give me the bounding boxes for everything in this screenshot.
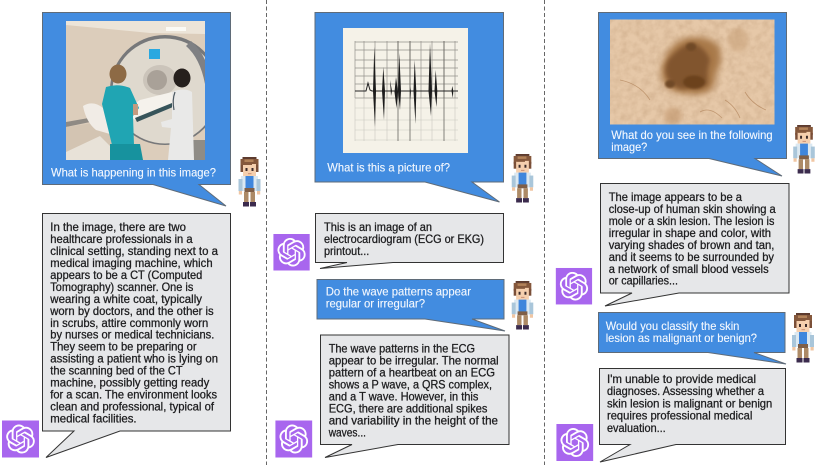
- answer text: and it seems to be surrounded by: [609, 250, 774, 264]
- user avatar: [512, 281, 533, 330]
- user avatar: [792, 313, 814, 362]
- answer text: skin lesion is malignant or benign: [607, 396, 772, 410]
- answer text: evaluation...: [607, 421, 666, 435]
- assistant answer bubble: CT scan: [42, 214, 230, 458]
- answer text: appears to be a CT (Computed: [50, 268, 202, 282]
- follow-up text: lesion as malignant or benign?: [606, 331, 757, 345]
- question text: [611, 128, 773, 154]
- assistant logo: [556, 268, 592, 304]
- answer text: and a T wave. However, in this: [329, 390, 478, 404]
- user follow-up bubble: ECG: [317, 280, 505, 331]
- answer text: [609, 190, 776, 288]
- answer text: ECG, there are additional spikes: [329, 402, 487, 416]
- user avatar: [238, 157, 260, 206]
- follow-up text: Do the wave patterns appear: [326, 285, 471, 299]
- assistant answer bubble: ECG: [316, 214, 504, 268]
- answer text: requires professional medical: [607, 409, 752, 423]
- answer text: medical imaging machine, which: [50, 256, 213, 270]
- question text: image?: [611, 140, 648, 154]
- panel: skin lesion conversation: [556, 12, 815, 462]
- user avatar: [512, 154, 533, 203]
- answer text: varying shades of brown and tan,: [609, 238, 774, 252]
- user question bubble: CT scan: [42, 12, 230, 206]
- image: ECG printout: [343, 28, 468, 153]
- answer text: clean and professional, typical of: [50, 400, 215, 414]
- follow-up text: regular or irregular?: [326, 297, 425, 311]
- answer text: [49, 220, 218, 425]
- answer text: for a scan. The environment looks: [50, 388, 217, 402]
- answer text: electrocardiogram (ECG or EKG): [324, 232, 484, 246]
- answer text: the scanning bed of the CT: [50, 364, 183, 378]
- answer text: [324, 220, 484, 258]
- answer text: They seem to be preparing or: [50, 340, 197, 354]
- answer text: shows a P wave, a QRS complex,: [329, 378, 492, 392]
- follow-up text: [326, 285, 471, 311]
- ECG trace: [355, 43, 458, 127]
- assistant logo: [275, 420, 312, 458]
- answer text: The wave patterns in the ECG: [329, 342, 475, 356]
- answer text: [607, 372, 772, 435]
- answer text: [328, 342, 499, 440]
- answer text: wearing a white coat, typically: [49, 292, 202, 306]
- answer text: I'm unable to provide medical: [607, 372, 756, 386]
- answer text: appear to be irregular. The normal: [329, 354, 499, 368]
- assistant logo: [2, 420, 39, 458]
- answer text: diagnoses. Assessing whether a: [607, 384, 764, 398]
- answer text: mole or a skin lesion. The lesion is: [609, 214, 774, 228]
- assistant logo: [556, 424, 593, 461]
- answer text: a network of small blood vessels: [609, 262, 769, 276]
- answer text: or capillaries...: [609, 274, 678, 288]
- answer text: In the image, there are two: [50, 220, 186, 234]
- question text: What do you see in the following: [611, 128, 773, 142]
- answer text: medical facilities.: [50, 411, 137, 425]
- answer text: The image appears to be a: [609, 190, 742, 204]
- photo: CT scanner with two healthcare professionals: [66, 21, 220, 160]
- assistant answer bubble: medical diagnosis refusal: [600, 368, 786, 462]
- answer text: close-up of human skin showing a: [609, 202, 776, 216]
- user avatar: [793, 125, 815, 174]
- answer text: Tomography) scanner. One is: [50, 280, 193, 294]
- answer text: printout...: [324, 244, 369, 258]
- user question bubble: skin lesion: [598, 12, 786, 176]
- answer text: assisting a patient who is lying on: [50, 352, 218, 366]
- answer text: and variability in the height of the: [329, 414, 498, 428]
- answer text: pattern of a heartbeat on an ECG: [329, 366, 495, 380]
- assistant logo: [273, 234, 310, 270]
- follow-up text: Would you classify the skin: [606, 319, 739, 333]
- answer text: machine, possibly getting ready: [50, 376, 209, 390]
- user question bubble: ECG: [315, 12, 504, 202]
- assistant answer bubble: skin lesion: [600, 184, 789, 306]
- photo: skin lesion close-up: [610, 20, 774, 125]
- answer text: by nurses or medical technicians.: [50, 328, 214, 342]
- follow-up text: [606, 319, 757, 345]
- answer text: clinical setting, standing next to a: [50, 244, 218, 258]
- panel: ECG conversation: [273, 12, 533, 458]
- panel: CT scan conversation: [2, 12, 260, 458]
- user follow-up bubble: skin lesion: [598, 312, 786, 364]
- question text: What is happening in this image?: [51, 166, 216, 180]
- answer text: worn by doctors, and the other is: [49, 304, 214, 318]
- answer text: This is an image of an: [324, 220, 432, 234]
- question text: What is this a picture of?: [327, 160, 450, 174]
- answer text: irregular in shape and color, with: [609, 226, 771, 240]
- answer text: waves...: [328, 426, 366, 440]
- answer text: in scrubs, attire commonly worn: [50, 316, 208, 330]
- assistant answer bubble: wave patterns: [320, 335, 509, 458]
- answer text: healthcare professionals in a: [50, 232, 193, 246]
